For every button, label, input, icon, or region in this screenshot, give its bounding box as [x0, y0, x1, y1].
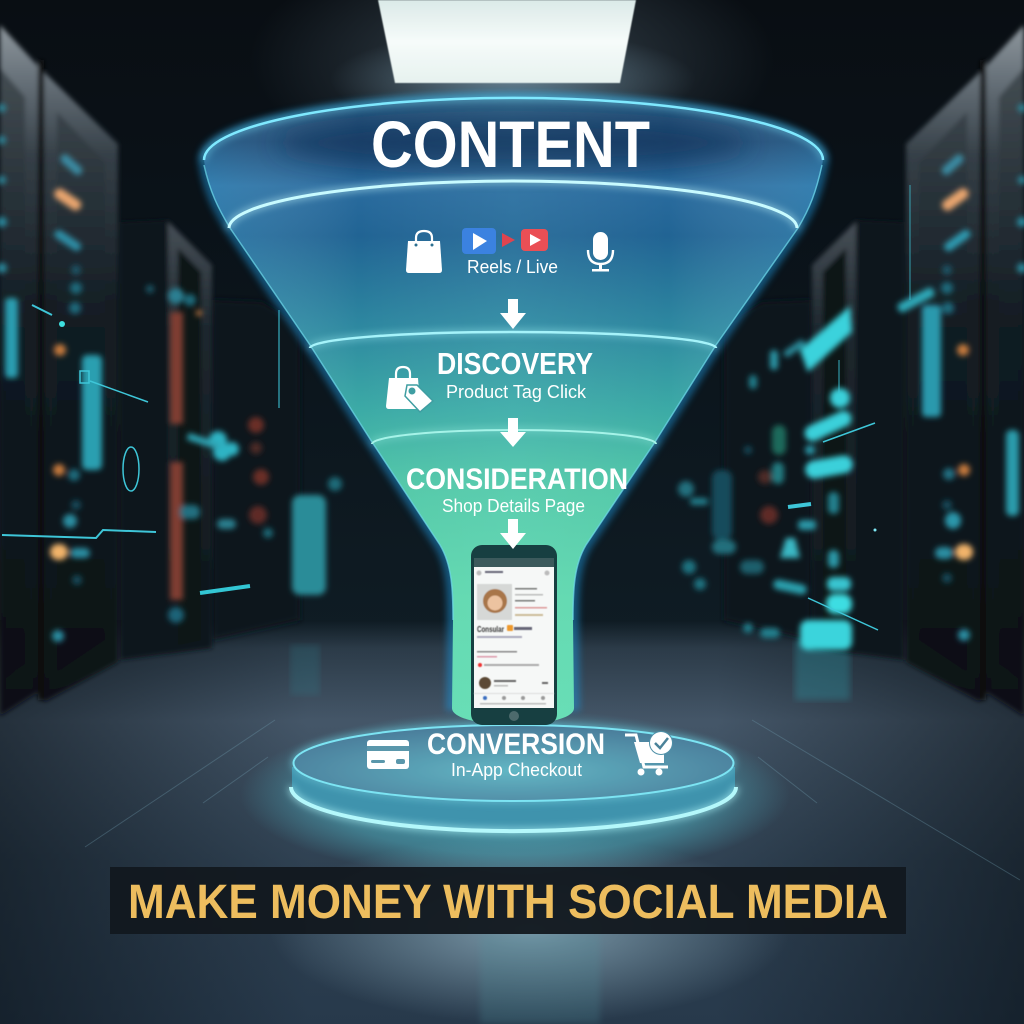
- funnel tier ring 1: [229, 181, 797, 228]
- funnel top rim: [204, 98, 823, 160]
- funnel tier ring 2: [310, 332, 716, 348]
- arrow: content to discovery: [500, 299, 526, 329]
- banner: make money with social media: MAKE MONEY WITH SOCIAL MEDIA: [128, 876, 888, 929]
- icon: shopping bag: [406, 231, 442, 273]
- icon: cart with check: [625, 731, 673, 776]
- text: in-app checkout: In-App Checkout: [451, 760, 582, 780]
- text: shop details page: Shop Details Page: [442, 496, 585, 516]
- text: product tag click: Product Tag Click: [446, 382, 587, 402]
- heading: conversion: CONVERSION: [427, 728, 605, 761]
- heading: discovery: DISCOVERY: [437, 346, 593, 381]
- platform: conversion base: [240, 710, 790, 880]
- icon: play buttons: [462, 228, 548, 254]
- funnel outline edges: [204, 165, 822, 620]
- heading: consideration: CONSIDERATION: [406, 463, 628, 496]
- phone screen text: Consular: [477, 624, 505, 634]
- funnel halo: [204, 98, 823, 705]
- text: reels / live: Reels / Live: [467, 257, 558, 277]
- ceiling light: [330, 0, 696, 130]
- heading: content: CONTENT: [371, 107, 650, 181]
- phone: [471, 545, 557, 725]
- server lights right: [678, 104, 1024, 650]
- arrow: consideration to phone: [500, 519, 526, 549]
- phone screen text: [474, 570, 554, 704]
- funnel body: [204, 98, 823, 725]
- left server racks: [0, 25, 300, 716]
- right server racks: [724, 25, 1024, 716]
- server lights left: [0, 104, 342, 642]
- icon: credit card: [367, 740, 409, 769]
- phone product photo: [477, 584, 512, 620]
- holographic lines: [2, 185, 910, 630]
- funnel tier ring 3: [372, 430, 656, 444]
- icon: microphone: [588, 232, 613, 272]
- icon: bag with tag: [386, 367, 433, 412]
- arrow: discovery to consideration: [500, 418, 526, 447]
- floor perspective lines: [85, 720, 1020, 880]
